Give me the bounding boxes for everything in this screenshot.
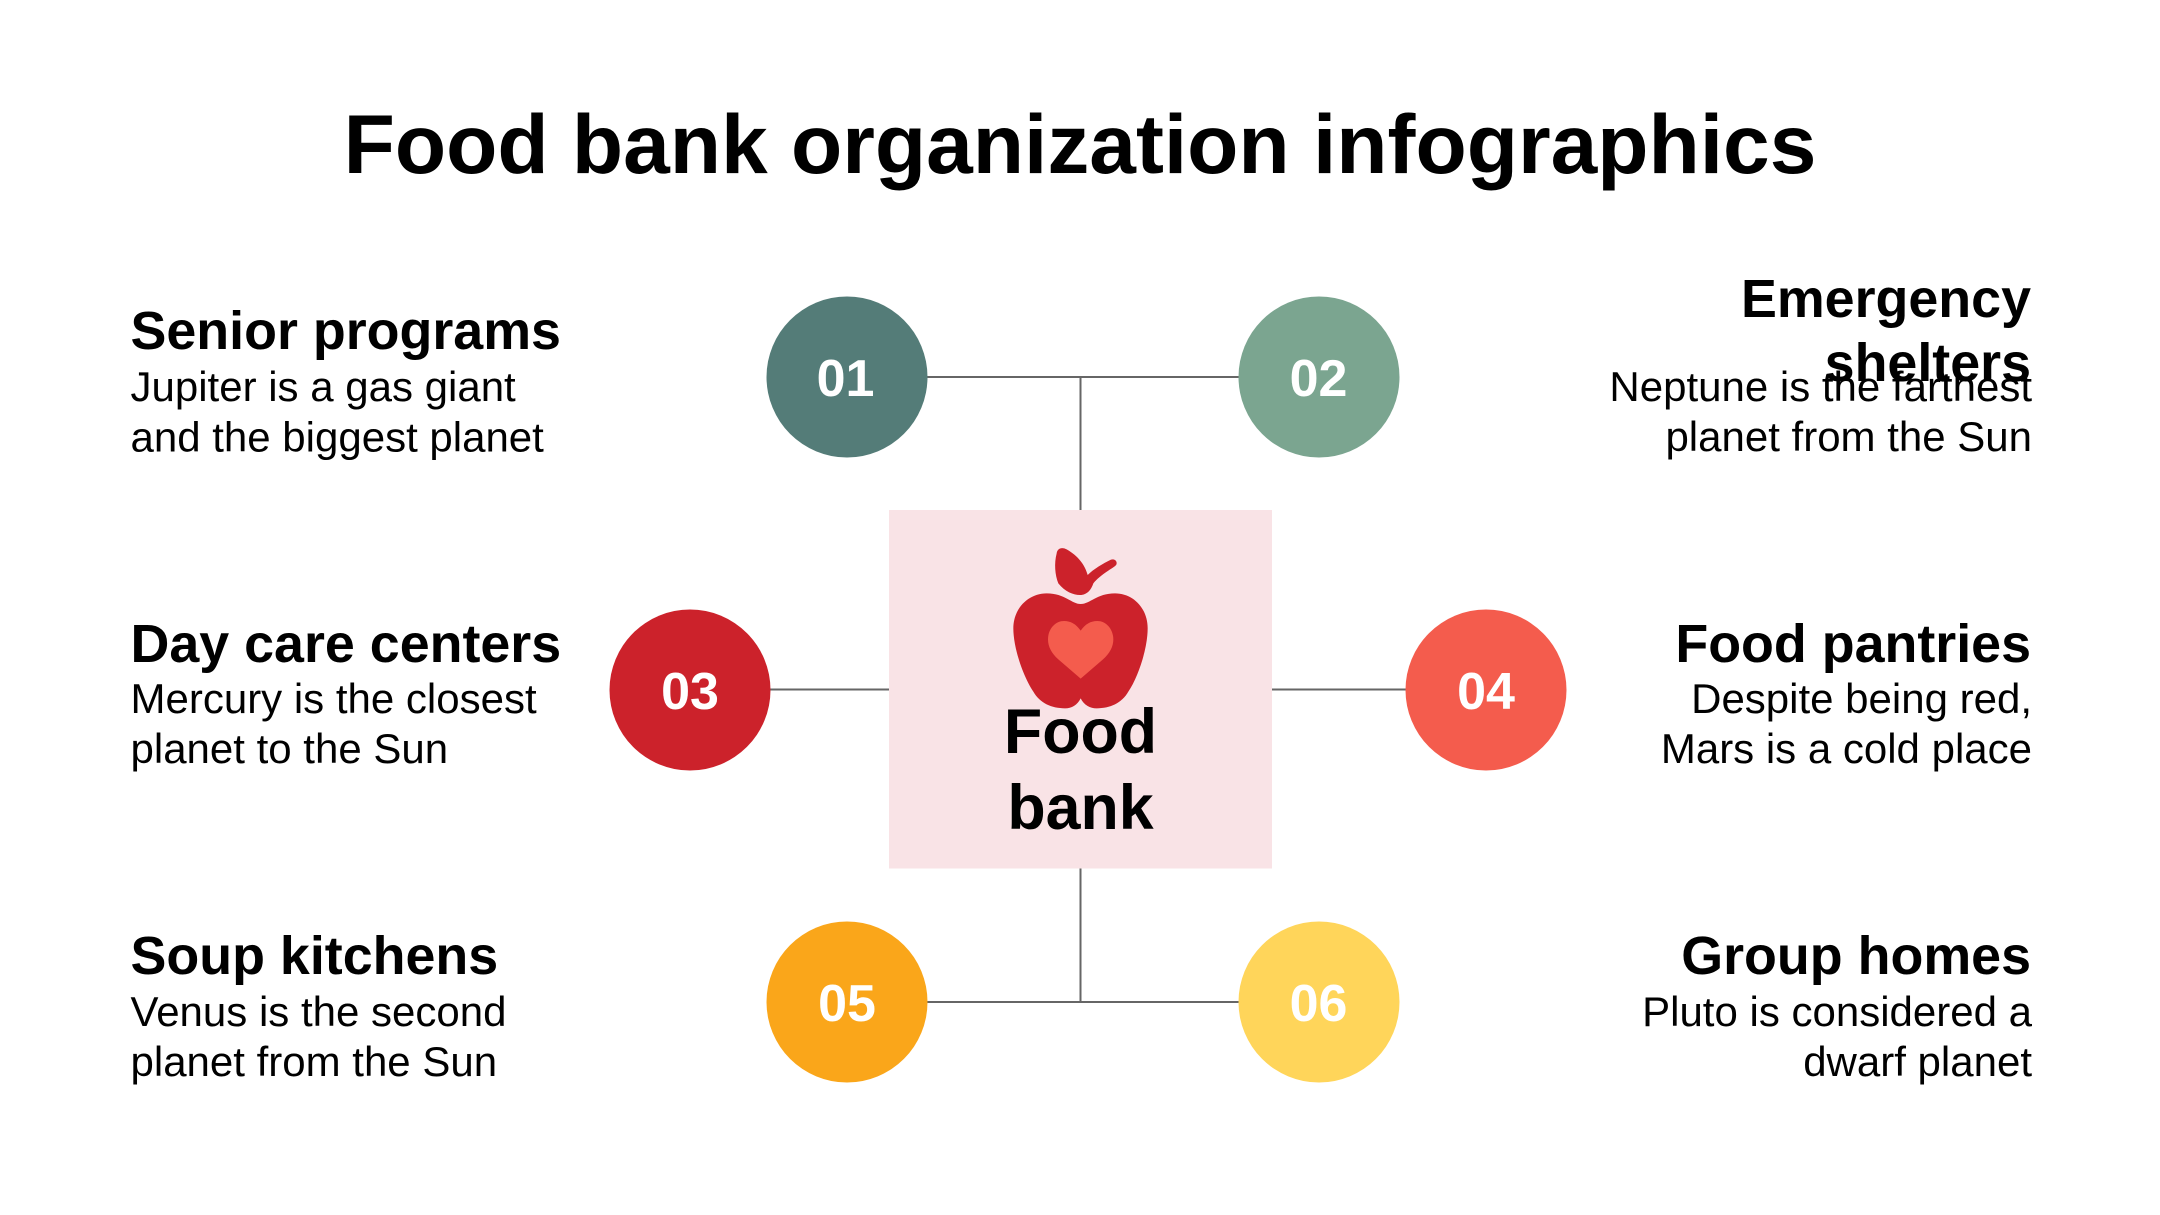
circle 06 — [1238, 922, 1400, 1082]
panel: central food bank: bank — [1007, 773, 1154, 843]
circle 01: 01 — [817, 350, 874, 408]
circle 04: 04 — [1457, 663, 1515, 721]
text block: day care centers — [130, 614, 561, 772]
text block: senior programs: and the biggest planet — [130, 414, 544, 460]
text block: senior programs — [130, 301, 561, 460]
circle 03 — [610, 610, 770, 770]
circle 05 — [766, 922, 928, 1082]
text block: food pantries: Food pantries — [1675, 614, 2031, 674]
text block: group homes: dwarf planet — [1803, 1038, 2032, 1085]
text block: emergency shelters: planet from the Sun — [1665, 413, 2032, 460]
text block: emergency shelters: shelters — [1825, 333, 2031, 393]
circle 04 — [1406, 610, 1566, 770]
title: Food bank organization infographics — [344, 97, 1816, 191]
text block: emergency shelters: Emergency — [1741, 269, 2031, 329]
circle 02 — [1238, 296, 1400, 458]
circle 03: 03 — [661, 663, 719, 721]
text block: soup kitchens: planet from the Sun — [130, 1038, 497, 1085]
text block: emergency shelters: Neptune is the farthest — [1609, 363, 2032, 410]
text block: soup kitchens: Venus is the second — [130, 988, 506, 1035]
text block: senior programs: Jupiter is a gas giant — [130, 363, 516, 410]
connector lines — [769, 377, 1406, 1002]
text block: soup kitchens: Soup kitchens — [130, 926, 498, 986]
circle 01 — [766, 296, 928, 458]
circle 02: 02 — [1290, 350, 1347, 408]
text block: group homes: Pluto is considered a — [1642, 988, 2033, 1035]
circle 05: 05 — [818, 975, 876, 1033]
center label: Food — [1004, 697, 1157, 767]
text block: soup kitchens — [130, 926, 506, 1085]
text block: food pantries — [1661, 614, 2032, 772]
central box background — [889, 510, 1272, 868]
text block: food pantries: Despite being red, — [1691, 675, 2032, 722]
text block: food pantries: Mars is a cold place — [1661, 725, 2032, 772]
icon: apple with heart — [1013, 548, 1148, 708]
text block: group homes — [1642, 926, 2033, 1085]
text block: group homes: Group homes — [1681, 926, 2031, 986]
text block: emergency shelters — [1609, 269, 2032, 460]
text block: day care centers: Mercury is the closest — [130, 675, 537, 722]
panel: central food bank — [889, 510, 1272, 868]
text block: day care centers: Day care centers — [130, 614, 561, 674]
text block: day care centers: planet to the Sun — [130, 725, 448, 772]
text block: senior programs: Senior programs — [130, 301, 561, 361]
circle 06: 06 — [1290, 975, 1347, 1033]
